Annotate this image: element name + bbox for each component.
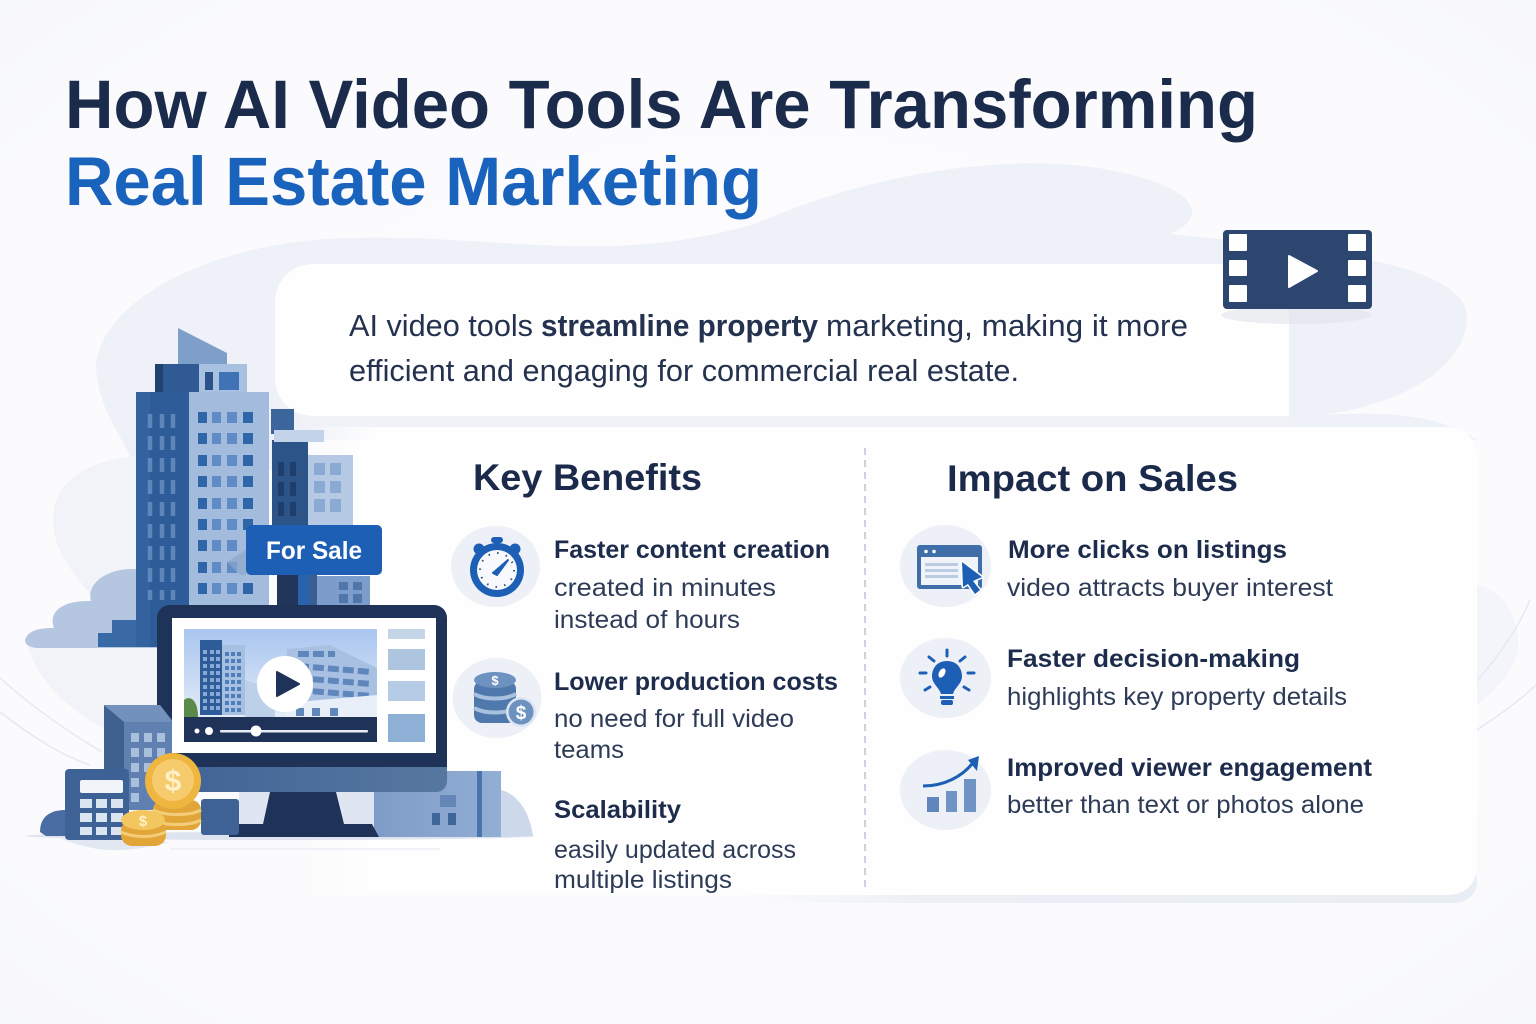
icon: gold coins: $	[165, 765, 182, 798]
impact: viewer engagement: Improved viewer engagement	[1007, 754, 1373, 782]
icon: gold coins: $	[139, 813, 148, 830]
callout: For Sale sign	[227, 525, 382, 575]
title: How AI Video Tools Are Transforming	[65, 66, 1258, 143]
icon: stopwatch	[451, 526, 540, 607]
icon: light bulb	[900, 638, 991, 718]
icon: browser click	[900, 525, 991, 607]
illustration: real estate scene	[25, 328, 535, 850]
intro text: streamline property	[541, 308, 819, 343]
heading: key benefits: Key Benefits	[473, 457, 702, 498]
benefit: scalability: multiple listings	[554, 866, 732, 894]
left small building	[40, 705, 172, 836]
benefit: faster content creation: Faster content creation	[554, 536, 830, 564]
impact: viewer engagement: better than text or photos alone	[1007, 791, 1364, 819]
icon: coin stack: $	[516, 703, 527, 724]
impact: faster decisions: highlights key property details	[1007, 683, 1347, 711]
benefit: scalability	[554, 796, 796, 894]
benefit: lower production costs	[554, 668, 838, 764]
clouds behind towers	[25, 569, 160, 648]
benefit: scalability: easily updated across	[554, 836, 796, 864]
small card behind coins	[201, 799, 239, 835]
band between cards	[300, 416, 1289, 427]
title	[65, 66, 1258, 220]
benefit: scalability: Scalability	[554, 796, 681, 824]
background blobs	[26, 163, 1518, 745]
benefit: lower production costs: Lower production costs	[554, 668, 838, 696]
decorative arcs	[0, 600, 1536, 770]
right mid towers	[271, 409, 370, 605]
video thumbnail	[184, 629, 377, 717]
impact: more clicks: More clicks on listings	[1008, 536, 1287, 564]
icon: calculator	[65, 769, 129, 840]
impact: more clicks	[1007, 536, 1333, 602]
panel: intro card	[275, 264, 1289, 416]
icon: coin stack	[452, 658, 542, 738]
intro text: AI video tools	[349, 308, 533, 343]
impact: faster decisions: Faster decision-making	[1007, 645, 1300, 673]
intro text: marketing, making it more	[826, 308, 1188, 343]
icon: gold coins	[121, 753, 201, 846]
title: Real Estate Marketing	[65, 143, 762, 220]
heading: impact on sales: Impact on Sales	[947, 458, 1238, 499]
benefit: lower production costs: teams	[554, 736, 624, 764]
impact: more clicks: video attracts buyer interest	[1007, 574, 1333, 602]
panel: impact on sales	[900, 458, 1373, 830]
panel: key benefits	[451, 457, 838, 894]
divider	[864, 448, 866, 892]
monitor	[157, 605, 447, 837]
ground shadow	[25, 832, 535, 840]
benefit: lower production costs: no need for full video	[554, 705, 794, 733]
intro text	[349, 308, 1188, 388]
icon: growth chart	[900, 750, 991, 830]
benefit: faster content creation: created in minutes	[554, 574, 776, 602]
video play button	[257, 656, 313, 712]
icon: film strip	[1221, 230, 1372, 324]
icon: coin stack: $	[491, 673, 499, 688]
panel: main card	[300, 427, 1477, 903]
low right building	[239, 771, 533, 837]
callout: For Sale sign: For Sale	[266, 537, 362, 565]
benefit: faster content creation: instead of hours	[554, 606, 740, 634]
left tall tower	[98, 328, 269, 647]
intro text: efficient and engaging for commercial real estate.	[349, 353, 1019, 388]
impact: faster decisions	[1007, 645, 1347, 711]
impact: viewer engagement	[1007, 754, 1373, 819]
benefit: faster content creation	[554, 536, 830, 634]
